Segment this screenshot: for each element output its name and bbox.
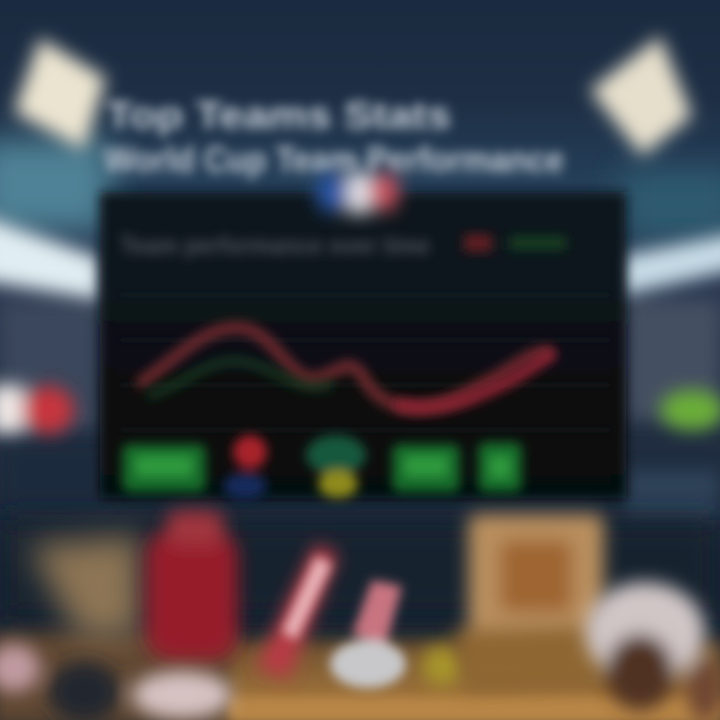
- icon: left flag: [0, 385, 74, 434]
- stadium light band right: [620, 232, 720, 296]
- stadium light band left: [0, 215, 100, 300]
- icon: ball: [585, 582, 720, 720]
- icon: wooden crate: [452, 514, 610, 690]
- icon: left floodlight: [14, 38, 106, 150]
- icon: yellow fruit: [422, 646, 462, 686]
- title: World Cup Team Performance: [104, 139, 564, 180]
- title: [104, 95, 564, 180]
- icon: pink bottle tall: [256, 544, 338, 680]
- wooden table: [0, 632, 720, 720]
- panel: chart dashboard: [100, 172, 626, 499]
- icon: red bottle: [146, 510, 238, 660]
- panel heading: Team performance over time: [120, 232, 430, 260]
- icon row: team badges: [122, 435, 522, 499]
- icon: woven basket: [28, 535, 142, 640]
- legend: [464, 234, 566, 252]
- icon: right floodlight: [590, 36, 692, 156]
- line chart: [120, 295, 610, 430]
- title: Top Teams Stats: [106, 95, 451, 137]
- icon: pink bottle short: [330, 580, 406, 688]
- icon: French flag: [316, 172, 399, 214]
- icon: right green flag: [660, 390, 720, 430]
- icon: bottom left items: [0, 644, 232, 720]
